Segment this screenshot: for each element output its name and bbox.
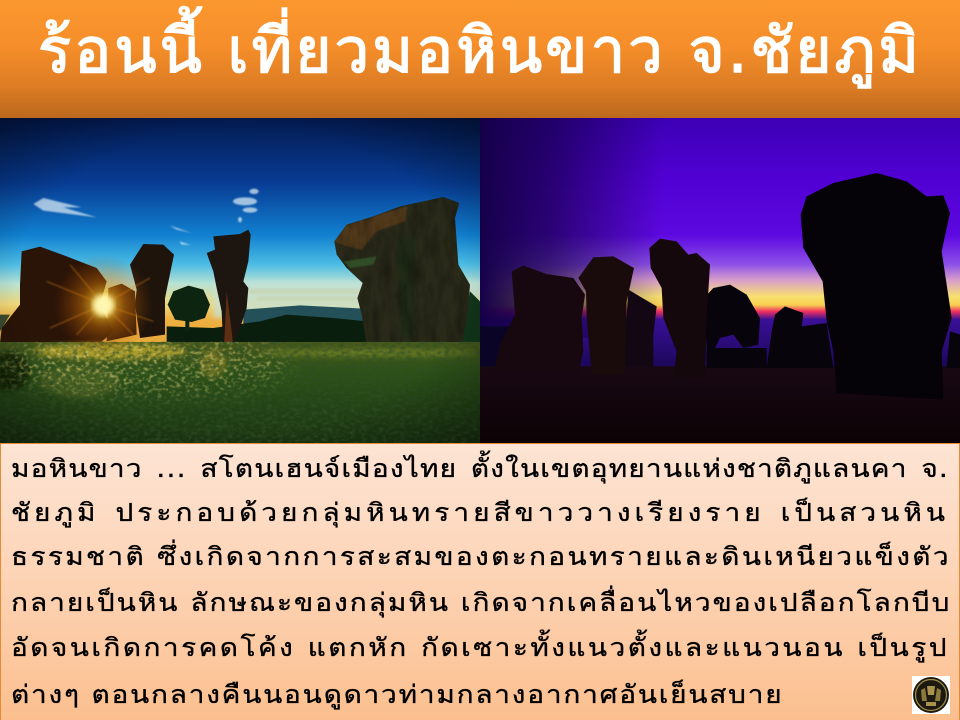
photo: Mo Hin Khao silhouettes at purple dusk (480, 118, 960, 443)
panel: description text (0, 443, 960, 720)
photo: Mo Hin Khao at sunset with blue sky and grass (0, 118, 682, 443)
tree silhouettes (704, 285, 960, 368)
text line 4: กลายเป็นหิน ลักษณะของกลุ่มหิน เกิดจากเคลื่อนไหวของเปลือกโลกบีบ (11, 588, 951, 617)
rock silhouettes (493, 173, 952, 400)
clouds (33, 189, 259, 245)
header banner (0, 0, 960, 118)
rocks (130, 244, 174, 338)
text line 3: ธรรมชาติ ซึ่งเกิดจากการสะสมของตะกอนทรายและดินเหนียวแข็งตัว (11, 542, 951, 571)
text line 5: อัดจนเกิดการคดโค้ง แตกหัก กัดเซาะทั้งแนวตั้งและแนวนอน เป็นรูป (11, 633, 949, 662)
text line 2: ชัยภูมิ ประกอบด้วยกลุ่มหินทรายสีขาววางเรียงราย เป็นสวนหิน (11, 498, 949, 527)
title: ร้อนนี้ เที่ยวมอหินขาว จ.ชัยภูมิ (38, 14, 922, 87)
text line 6: ต่างๆ ตอนกลางคืนนอนดูดาวท่ามกลางอากาศอันเย็นสบาย (11, 680, 783, 709)
pale horizon glow (213, 281, 480, 318)
sun with rays (47, 255, 153, 355)
text line 1: มอหินขาว ... สโตนเฮนจ์เมืองไทย ตั้งในเขตอุทยานแห่งชาติภูแลนคา จ. (11, 454, 949, 483)
trees line (167, 315, 367, 348)
grass (0, 342, 480, 443)
ground (480, 366, 960, 443)
icon: government seal logo (912, 676, 950, 714)
